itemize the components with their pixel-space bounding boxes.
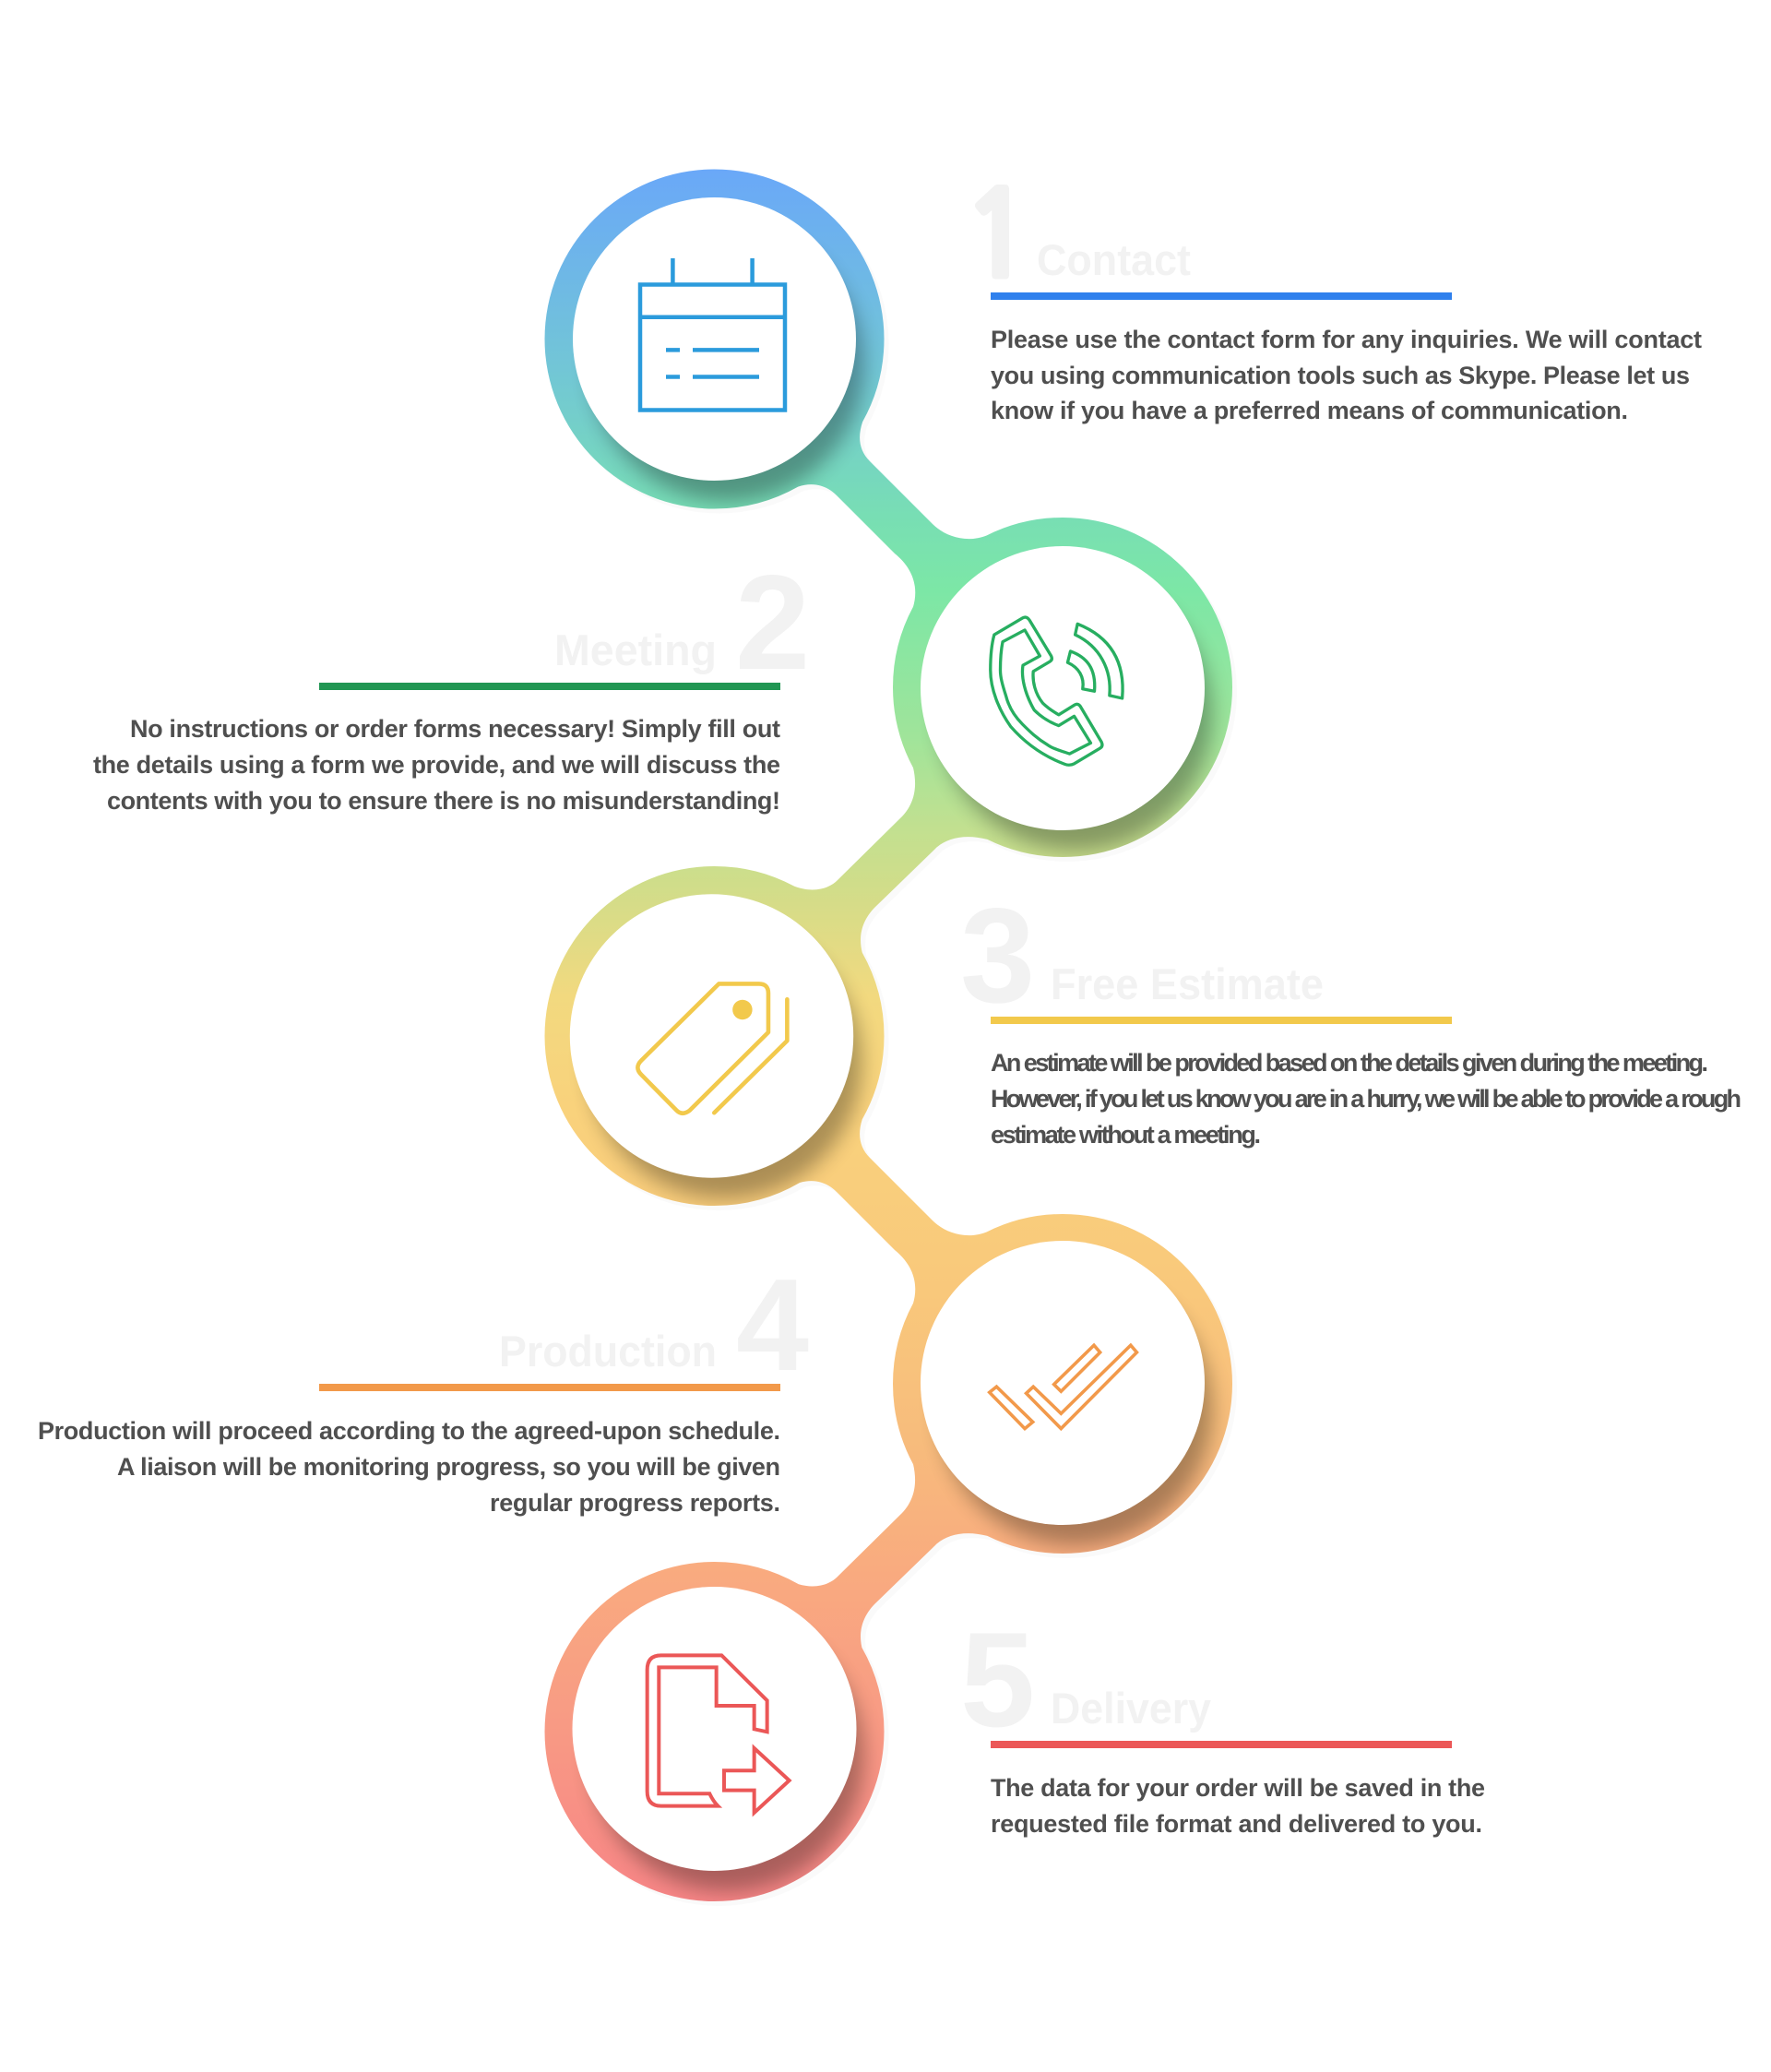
text panel: step 3 Free Estimate <box>960 880 1741 1149</box>
description: Delivery: The data for your order will be saved in the <box>991 1774 1485 1802</box>
text panel: step 2 Meeting <box>93 547 810 815</box>
icon: double check mark <box>990 1345 1136 1429</box>
description: Free Estimate: estimate without a meeting. <box>991 1121 1261 1149</box>
panel: step 4 circle <box>921 1241 1212 1545</box>
heading: Delivery: Delivery <box>1051 1684 1211 1733</box>
white disc: step 5 <box>572 1587 856 1871</box>
shadow: step 3 <box>588 925 862 1198</box>
description: Contact <box>991 326 1702 424</box>
number 2: 2 <box>735 547 810 697</box>
heading: Free Estimate: Free Estimate <box>1051 959 1324 1008</box>
description: Free Estimate <box>991 1049 1741 1149</box>
description: Contact: Please use the contact form for any inquiries. We will contact <box>991 326 1702 353</box>
white disc: step 4 <box>921 1241 1205 1525</box>
description: Meeting: No instructions or order forms necessary! Simply fill out <box>130 715 780 743</box>
description: Delivery: requested file format and delivered to you. <box>991 1810 1482 1838</box>
heading: Meeting: Meeting <box>554 625 717 674</box>
text panel: step 4 Production <box>38 1252 809 1517</box>
accent bar: green <box>319 683 780 690</box>
heading: Production: Production <box>499 1327 717 1375</box>
description: Production <box>38 1417 780 1517</box>
description: Free Estimate: An estimate will be provided based on the details given during the meeting. <box>991 1049 1708 1077</box>
text panel: step 5 Delivery <box>960 1604 1485 1838</box>
number 5: 5 <box>960 1604 1035 1755</box>
panel: step 1 circle <box>573 197 863 502</box>
text panel: step 1 Contact <box>962 177 1702 424</box>
icon: calendar <box>640 258 785 410</box>
panel: step 2 circle <box>921 546 1212 851</box>
connected ribbon of five rings <box>526 157 1259 1923</box>
white disc: step 1 <box>573 197 856 481</box>
number 3: 3 <box>960 880 1035 1030</box>
icon: telephone with signal waves <box>991 617 1123 765</box>
description: Meeting <box>93 715 780 815</box>
shadow: step 5 <box>590 1618 863 1891</box>
description: Meeting: the details using a form we provide, and we will discuss the <box>93 751 780 779</box>
number 4: 4 <box>736 1252 809 1399</box>
description: Delivery <box>991 1774 1485 1838</box>
number 1: 1 <box>962 177 1034 295</box>
shadow: step 4 <box>939 1272 1212 1545</box>
description: Production: Production will proceed according to the agreed-upon schedule. <box>38 1417 780 1445</box>
accent bar: blue <box>991 292 1452 300</box>
description: Production: regular progress reports. <box>490 1489 780 1517</box>
description: Contact: you using communication tools such as Skype. Please let us <box>991 362 1690 389</box>
heading: Contact: Contact <box>1037 235 1191 284</box>
panel: step 5 circle <box>572 1587 863 1891</box>
description: Production: A liaison will be monitoring progress, so you will be given <box>117 1453 780 1481</box>
shadow: step 2 <box>939 578 1212 851</box>
icon: price tag <box>637 983 787 1113</box>
description: Meeting: contents with you to ensure there is no misunderstanding! <box>107 787 780 815</box>
description: Contact: know if you have a preferred means of communication. <box>991 397 1628 424</box>
icon: document with arrow <box>648 1655 790 1813</box>
shadow: step 1 <box>590 229 863 502</box>
accent bar: yellow <box>991 1017 1452 1024</box>
description: Free Estimate: However, if you let us know you are in a hurry, we will be able to provide a rough <box>991 1085 1741 1113</box>
panel: step 3 circle <box>570 894 862 1198</box>
accent bar: orange <box>319 1384 780 1391</box>
accent bar: red <box>991 1741 1452 1748</box>
white disc: step 2 <box>921 546 1205 830</box>
white disc: step 3 <box>570 894 853 1178</box>
